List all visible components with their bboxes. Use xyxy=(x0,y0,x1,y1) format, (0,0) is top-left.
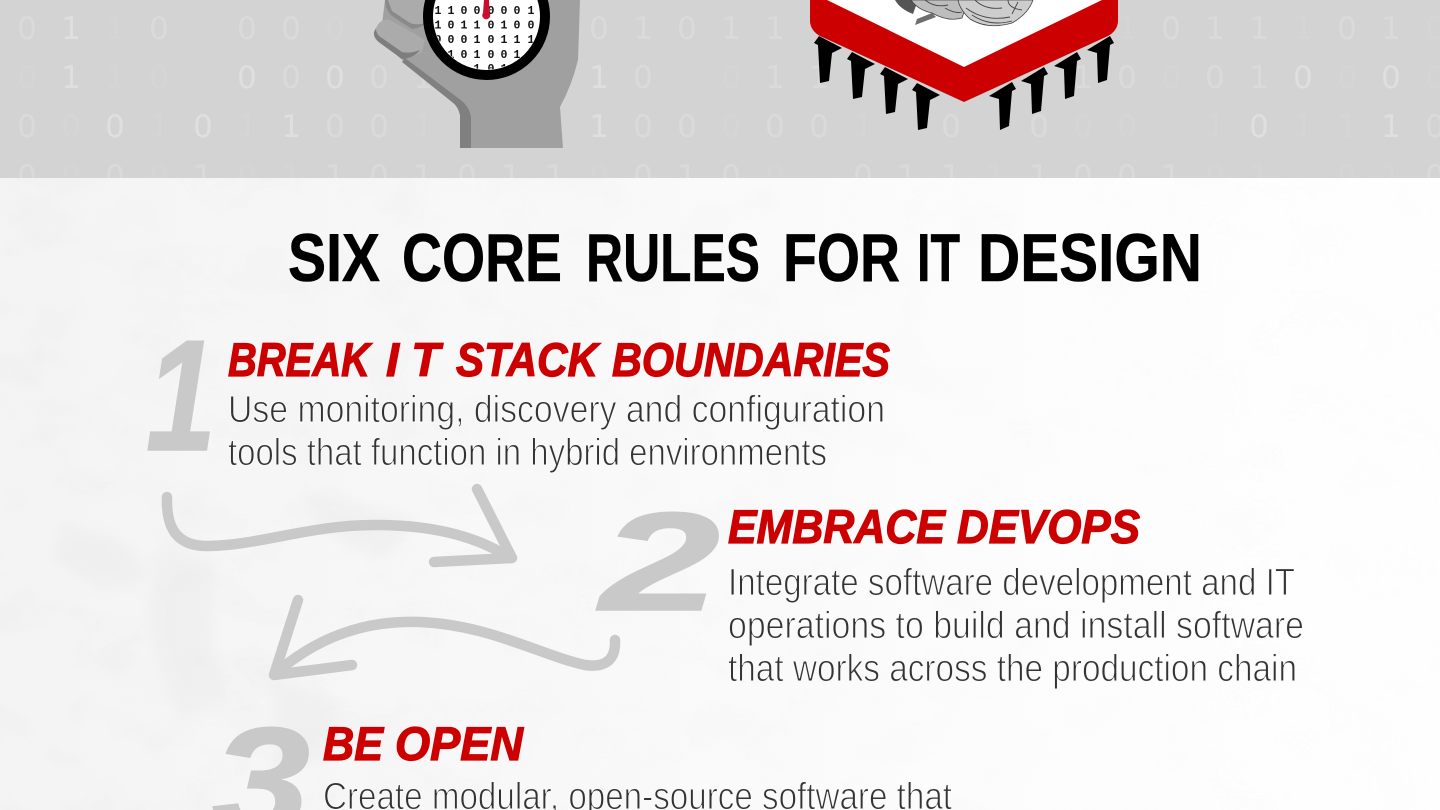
number 2: 2 xyxy=(595,483,720,640)
rule 1 description: tools that function in hybrid environments xyxy=(228,432,827,474)
stopwatch binary face: 00010111 xyxy=(435,34,535,47)
rule 2 description: that works across the production chain xyxy=(728,648,1297,690)
panel: marble textured background xyxy=(0,178,748,810)
rule 2 description xyxy=(728,562,1304,690)
binary digit pattern: 00010010101 xyxy=(61,159,1401,195)
rule 2 heading: DEVOPS xyxy=(957,500,1140,553)
wrist shadow xyxy=(402,58,471,148)
chip red body xyxy=(810,0,1118,102)
stopwatch binary face: 10110100 xyxy=(435,20,535,32)
brain stem xyxy=(915,13,936,25)
rule 2 heading: EMBRACE xyxy=(728,500,946,553)
rule 1 xyxy=(146,308,890,484)
rule 3 heading: OPEN xyxy=(395,717,524,770)
brain hind lobe xyxy=(895,0,918,14)
brain xyxy=(895,0,1033,26)
rule 2 xyxy=(595,483,1304,690)
binary digit pattern: 100100 xyxy=(61,60,1401,96)
rule 2 description: operations to build and install software xyxy=(728,605,1304,647)
rule 1 heading: IT xyxy=(386,333,444,386)
arrow: rule 2 to rule 3 xyxy=(274,600,615,675)
binary digit pattern: 00110101101001110010 xyxy=(17,159,1440,195)
title: FOR xyxy=(783,220,900,296)
brain right lobe xyxy=(958,0,1033,26)
arrow: rule 1 to rule 2 xyxy=(167,489,512,562)
title: IT xyxy=(917,220,960,296)
brain folds xyxy=(925,0,1022,23)
stopwatch binary face xyxy=(435,6,534,70)
stopwatch binary face: 101001 xyxy=(448,49,521,62)
rule 3 heading: BE xyxy=(323,717,385,770)
title: RULES xyxy=(586,220,760,296)
chip white face xyxy=(827,0,1102,67)
stopwatch needle xyxy=(482,0,490,19)
brain left lobe xyxy=(911,0,968,19)
rule 1 heading xyxy=(228,333,890,386)
rule 2 heading xyxy=(728,500,1140,553)
title xyxy=(288,220,1202,296)
rule 3 xyxy=(212,696,952,810)
rule 1 heading: BREAK xyxy=(228,333,373,386)
upper finger shadow xyxy=(385,0,427,29)
binary digit pattern: 001101 xyxy=(105,109,1401,145)
icon: hand holding stopwatch xyxy=(374,0,580,148)
binary digit pattern: 01110100111 xyxy=(61,109,1357,145)
lower finger xyxy=(375,20,425,56)
hand palm xyxy=(380,0,580,148)
panel: grey binary header band xyxy=(0,0,1440,195)
binary digit pattern: 10110 xyxy=(105,11,1440,47)
rule 3 heading xyxy=(323,717,524,770)
binary digit pattern: 0010111001 xyxy=(281,60,1269,96)
binary digit pattern: 00000101101101 xyxy=(17,11,1401,47)
rule 1 heading: STACK xyxy=(456,333,601,386)
binary digit pattern: 0000000000 xyxy=(17,109,1440,145)
title: DESIGN xyxy=(978,220,1202,296)
rule 1 heading: BOUNDARIES xyxy=(612,333,890,386)
stopwatch binary face: 11000001 xyxy=(435,5,535,18)
stopwatch ring xyxy=(428,0,545,75)
stopwatch binary face: 101 xyxy=(474,63,508,76)
upper finger xyxy=(385,0,432,28)
binary digit pattern: 0100000 xyxy=(17,60,1440,96)
chip pins xyxy=(814,36,1114,130)
binary digit pattern xyxy=(17,11,1440,195)
title: SIX xyxy=(288,220,380,296)
title: CORE xyxy=(402,220,562,296)
lower finger shadow xyxy=(374,28,420,59)
number 1: 1 xyxy=(146,308,216,484)
icon: microchip with brain xyxy=(810,0,1118,130)
rule 1 description xyxy=(228,389,885,474)
binary digit pattern: 1 xyxy=(61,11,81,47)
rule 2 description: Integrate software development and IT xyxy=(728,562,1295,604)
rule 1 description: Use monitoring, discovery and configuration xyxy=(228,389,885,431)
